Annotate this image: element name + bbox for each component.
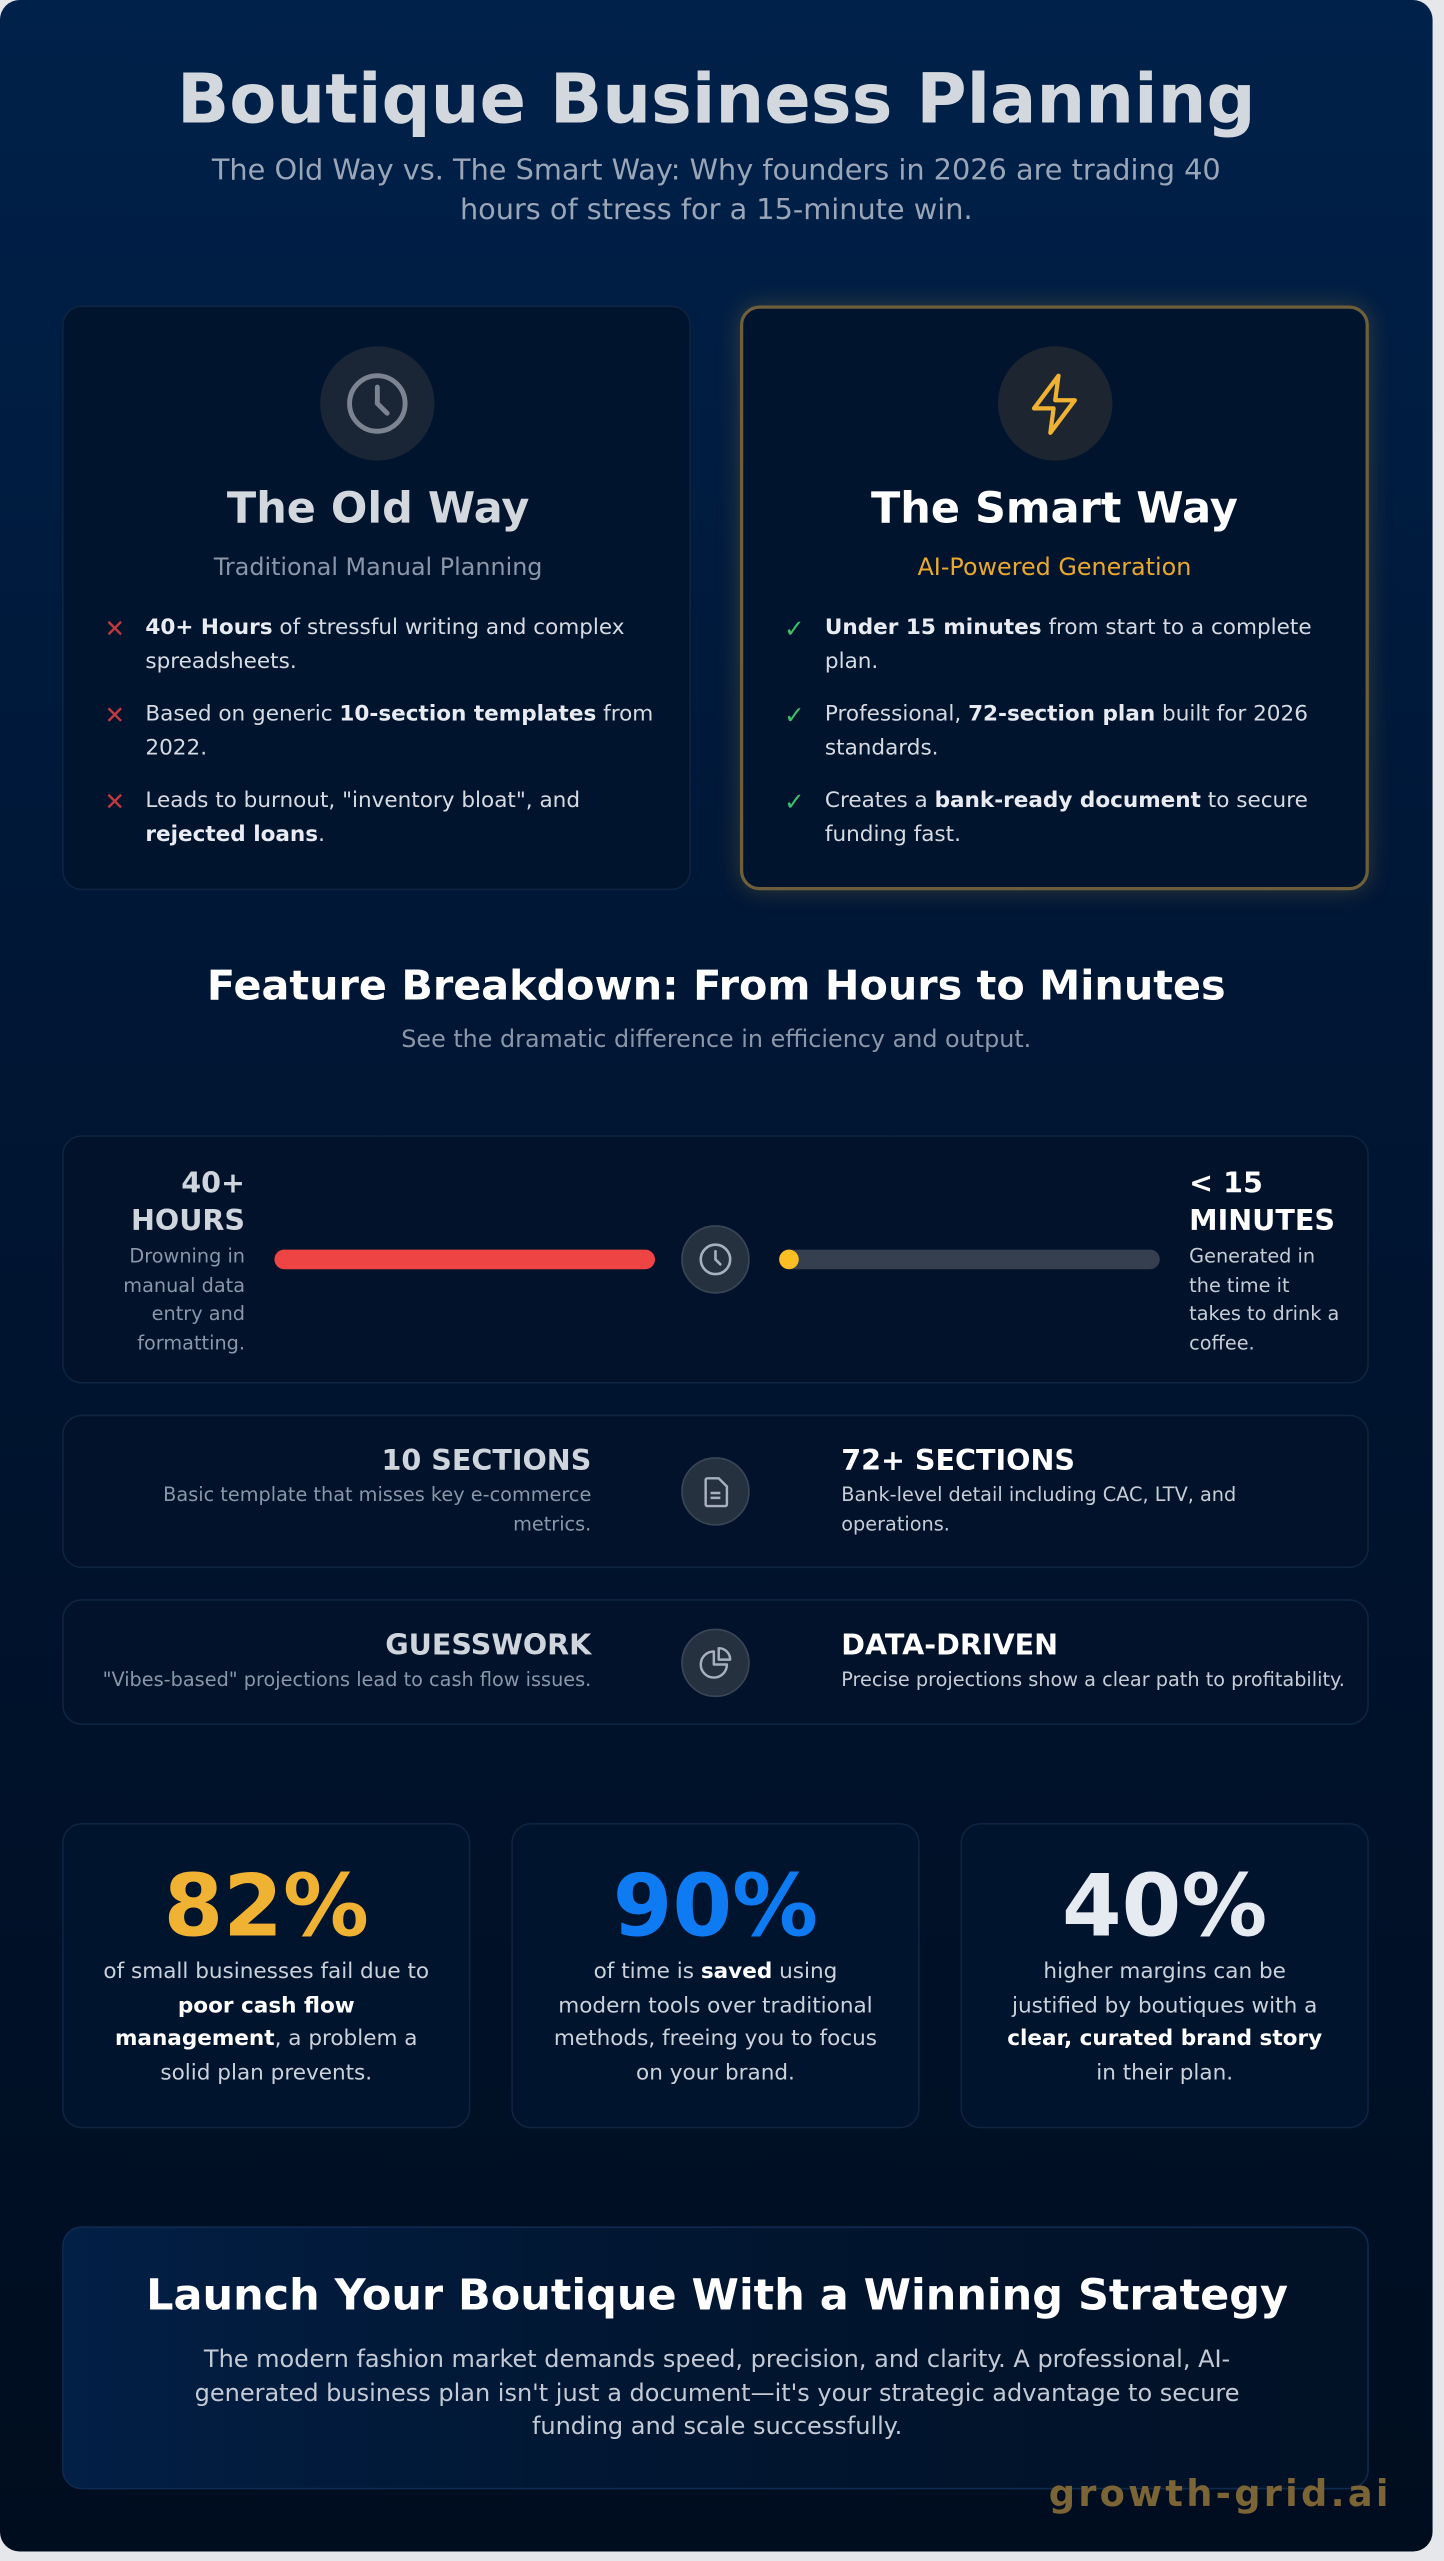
old: guesswork: "Vibes-based" projections lead to cash flow issues. (103, 1668, 591, 1691)
panel: smart way: ✓ (784, 701, 805, 730)
subheading: See the dramatic difference in efficiency and output. (401, 1026, 1031, 1054)
panel: smart way: Professional, 72-section plan built for 2026 standards. (825, 702, 1308, 760)
new: minutes (1189, 1168, 1339, 1353)
new: sections (841, 1446, 1236, 1535)
new: minutes: Generated in the time it takes to drink a coffee. (1189, 1245, 1339, 1353)
old: hours: 40+ HOURS (131, 1168, 245, 1238)
stat: 82% (62, 1823, 470, 2128)
bar: old (274, 1250, 655, 1269)
new: data-driven (841, 1630, 1345, 1691)
old: sections (163, 1446, 591, 1535)
panel: old way: ✕ (105, 701, 125, 730)
row: time comparison (62, 1135, 1369, 1384)
subheading: Traditional Manual Planning (214, 554, 542, 582)
panel: smart way (740, 305, 1369, 890)
row: guesswork vs data (62, 1599, 1369, 1725)
stat: 40%: 40% (1062, 1857, 1267, 1957)
new: sections: 72+ SECTIONS (841, 1446, 1075, 1478)
panel: call to action (62, 2226, 1369, 2489)
subheading: AI-Powered Generation (917, 554, 1191, 582)
panel: smart way: ✓ (784, 787, 805, 817)
panel: smart way: Creates a bank-ready document to secure funding fast. (825, 789, 1308, 847)
heading: smart way: The Smart Way (871, 485, 1238, 534)
stat: 90%: 90% (613, 1857, 818, 1957)
panel: old way (62, 305, 691, 890)
heading: old way: The Old Way (227, 485, 529, 534)
title: Boutique Business Planning (177, 59, 1256, 139)
old: guesswork: GUESSWORK (385, 1630, 591, 1663)
icon: document (681, 1457, 750, 1526)
panel: old way: ✕ (105, 614, 125, 644)
stat: 90% (511, 1823, 920, 2128)
new: minutes: < 15 MINUTES (1189, 1168, 1335, 1238)
old: hours: Drowning in manual data entry and formatting. (123, 1245, 245, 1353)
stat: 82%: of small businesses fail due to poor cash flow management, a problem a solid plan prevents. (103, 1960, 429, 2085)
bar: new (779, 1250, 1160, 1269)
stat: 40% (960, 1823, 1369, 2128)
icon: clock (320, 346, 435, 461)
stat: 82%: 82% (164, 1857, 369, 1957)
heading: feature breakdown: Feature Breakdown: From Hours to Minutes (207, 962, 1226, 1009)
bullet list (105, 614, 653, 847)
cta text: The modern fashion market demands speed, precision, and clarity. A professional, AI-generated business plan isn't just a document—it's your strategic advantage to secure funding and scale successfully. (195, 2346, 1240, 2440)
new: data-driven: DATA-DRIVEN (841, 1630, 1058, 1663)
panel: old way: Leads to burnout, "inventory bloat", and rejected loans. (145, 789, 580, 847)
panel: old way: ✕ (105, 787, 125, 817)
stat: 40%: higher margins can be justified by boutiques with a clear, curated brand story in their plan. (1007, 1960, 1322, 2085)
new: sections: Bank-level detail including CAC, LTV, and operations. (841, 1483, 1236, 1535)
cta heading: Launch Your Boutique With a Winning Strategy (146, 2272, 1288, 2321)
panel: old way: Based on generic 10-section templates from 2022. (145, 702, 653, 760)
panel: smart way: ✓ (784, 614, 805, 644)
old: sections: 10 SECTIONS (382, 1446, 591, 1478)
old: guesswork (103, 1630, 592, 1691)
old: sections: Basic template that misses key e-commerce metrics. (163, 1483, 591, 1535)
icon: pie chart (681, 1629, 750, 1697)
old: hours (123, 1168, 245, 1354)
stat: 90%: of time is saved using modern tools over traditional methods, freeing you to focus on your brand. (554, 1960, 877, 2085)
icon: clock (681, 1225, 750, 1294)
panel: old way: 40+ Hours of stressful writing and complex spreadsheets. (145, 616, 625, 674)
row: sections (62, 1415, 1369, 1568)
subtitle: The Old Way vs. The Smart Way: Why founders in 2026 are trading 40 hours of stress for a 15-minute win. (212, 155, 1221, 226)
icon: lightning (998, 346, 1112, 461)
new: data-driven: Precise projections show a clear path to profitability. (841, 1668, 1345, 1691)
brand watermark: growth-grid.ai (1049, 2473, 1392, 2516)
bullet list (784, 614, 1312, 847)
panel: smart way: Under 15 minutes from start to a complete plan. (825, 616, 1312, 674)
